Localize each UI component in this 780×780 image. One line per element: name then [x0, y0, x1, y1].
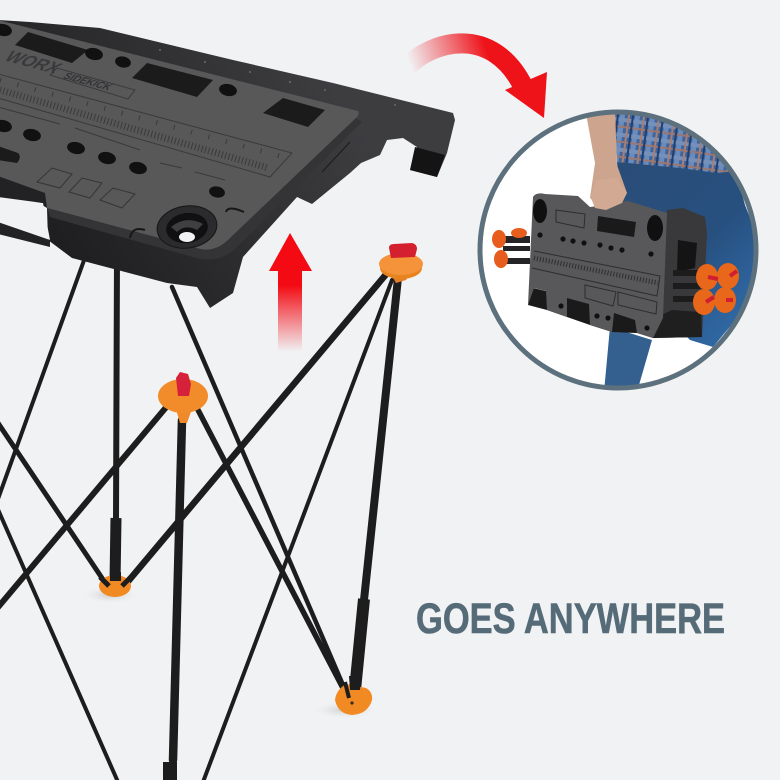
- table end dark clip: [410, 147, 445, 177]
- handle frame lip: [0, 176, 47, 206]
- notch shadows: [528, 288, 653, 338]
- orange leg caps, right: [693, 263, 739, 315]
- orange foot: rear: [99, 572, 131, 597]
- shirt: [615, 114, 729, 173]
- tabletop surface: [0, 20, 362, 260]
- bench ruler: [532, 210, 660, 314]
- arm: [586, 114, 627, 200]
- body edge lines: [322, 142, 350, 172]
- foot shadows: [80, 586, 379, 719]
- table legs: [0, 252, 398, 780]
- orange cap: right leg: [379, 243, 423, 283]
- handle opening: [0, 197, 50, 240]
- handle bar: [0, 222, 50, 247]
- rectangular slots: [0, 32, 325, 163]
- orange foot: front: [335, 676, 372, 715]
- orange leg caps, left: [492, 228, 527, 268]
- jeans: [617, 162, 756, 347]
- embossed pictograms: [37, 168, 135, 208]
- hand gripping handle: [591, 178, 627, 210]
- ruler: [0, 68, 292, 180]
- orange cap: centre leg: [158, 372, 208, 423]
- bench window slot: [597, 216, 636, 237]
- circular inset: carrying the folded workbench: [480, 108, 756, 392]
- peg holes: [0, 22, 238, 199]
- folded workbench: [492, 178, 739, 338]
- brand text on tabletop: WORX: [0, 47, 68, 77]
- bench face: [528, 193, 667, 338]
- model text on tabletop: SIDEKICK: [60, 71, 115, 93]
- bench holes: [533, 199, 663, 331]
- corner leg socket: [154, 202, 220, 252]
- red up arrow: [269, 233, 312, 352]
- table body underside: [0, 20, 455, 308]
- back rail studs: [159, 49, 396, 106]
- curved red arrow: [407, 43, 547, 118]
- clip lugs: [130, 208, 244, 238]
- extended legs, left: [500, 236, 530, 264]
- extended legs, right: [673, 270, 700, 302]
- circle frame: [480, 112, 756, 388]
- dark side of bench: [650, 208, 707, 338]
